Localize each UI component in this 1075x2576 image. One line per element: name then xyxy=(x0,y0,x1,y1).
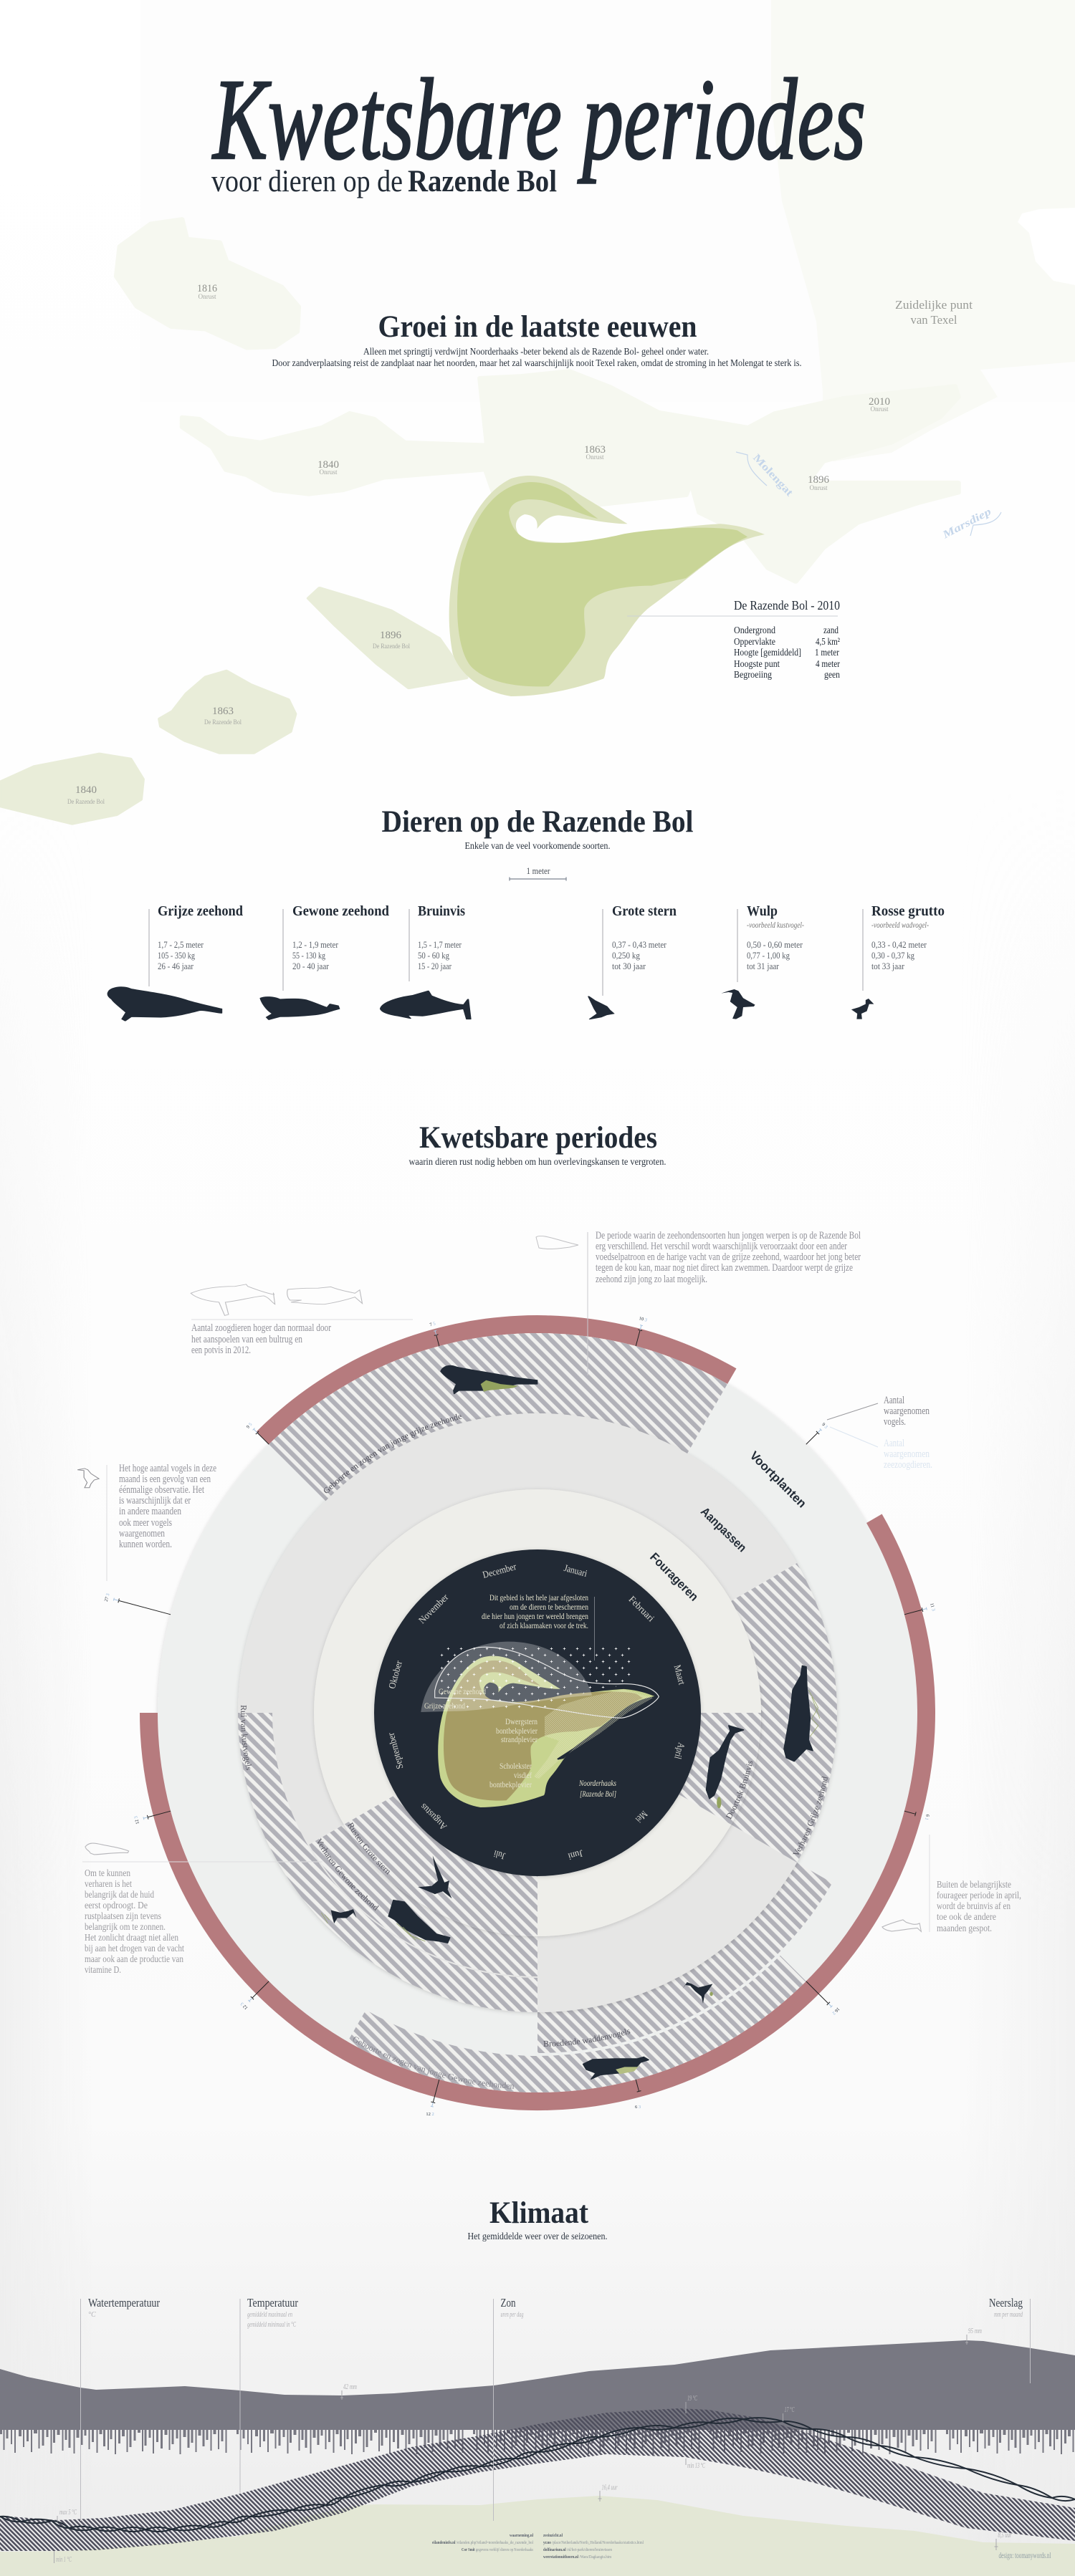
callout: seal pupping periods: zeehond zijn jong zo laat mogelijk. xyxy=(596,1274,707,1285)
callout: seal pupping periods: erg verschillend. Het verschil wordt waarschijnlijk veroorzaakt door een ander xyxy=(596,1241,847,1252)
facts table: De Razende Bol 2010: 1 meter xyxy=(815,648,839,658)
species: Gewone zeehond: 1,2 - 1,9 meter xyxy=(292,939,339,950)
series label: Neerslag: mm per maand xyxy=(994,2311,1023,2319)
animal icons in rings xyxy=(321,1365,820,2079)
species: Rosse grutto xyxy=(851,904,945,1019)
channel: Marsdiep: Marsdiep xyxy=(940,506,993,542)
hatched period: moult harbour seal xyxy=(309,1825,538,1976)
callout: whales xyxy=(191,1284,413,1356)
note: closed area: die hier hun jongen ter wereld brengen xyxy=(482,1611,588,1621)
species: Grote stern: 0,250 kg xyxy=(612,950,640,961)
map label: 1896: 1896 xyxy=(808,474,830,486)
centre map: Noorderhaaks xyxy=(421,1592,659,1807)
species: Rosse grutto: Rosse grutto xyxy=(871,904,945,919)
species: Gewone zeehond: 20 - 40 jaar xyxy=(292,961,330,971)
map label: 1840: 1840 xyxy=(317,459,339,471)
map label: 2010 xyxy=(869,396,890,413)
species: Wulp: tot 31 jaar xyxy=(747,961,780,971)
data label: 95 mm xyxy=(965,2327,982,2345)
middle ring: Aanpassen xyxy=(238,1413,837,2012)
map shapes: Onrust historic positions xyxy=(117,219,958,582)
sources left column xyxy=(432,2533,533,2552)
callout: whales: Aantal zoogdieren hoger dan normaal door xyxy=(191,1322,331,1334)
callout: moulting: Het zonlicht draagt niet allen xyxy=(85,1932,178,1943)
labels on island: bontbekplevier xyxy=(489,1779,532,1789)
month observation ticks: 10 3 xyxy=(639,1316,648,1323)
labels on island: visdief xyxy=(514,1770,532,1780)
scale bar: 1 meter xyxy=(510,865,566,881)
map label: 1840 Razende Bol xyxy=(67,784,105,805)
map label: 1896 Razende Bol xyxy=(373,630,410,650)
icon: seal outline xyxy=(536,1236,578,1249)
callout: moulting: eerst opdroogt. De xyxy=(85,1900,148,1911)
facts table: De Razende Bol 2010: zand xyxy=(823,625,838,636)
callout: moulting: vitamine D. xyxy=(85,1964,121,1975)
centre disc xyxy=(374,1549,701,1876)
callout: birds one-off observation xyxy=(77,1463,216,1581)
map label: 1840: Onrust xyxy=(320,468,338,476)
sources right column xyxy=(543,2533,644,2560)
callout: birds one-off observation: in andere maanden xyxy=(119,1506,182,1517)
map label: 1840 Razende Bol: 1840 xyxy=(75,784,97,796)
data label: 95 mm: 95 mm xyxy=(968,2327,982,2335)
legend: observed birds: Aantal xyxy=(884,1395,904,1406)
section: vulnerable periods heading xyxy=(408,1121,666,1168)
section: animals heading: Enkele van de veel voorkomende soorten. xyxy=(464,841,611,852)
icon: godwit moulting xyxy=(321,1909,356,1923)
island olive xyxy=(444,1661,643,1801)
species: Gewone zeehond xyxy=(261,904,389,1019)
icon: curlew foraging xyxy=(682,1982,713,2004)
pink arc: spring to autumn observation band xyxy=(140,1514,935,2110)
radial chart: vulnerable periods per month xyxy=(77,1230,1021,2117)
hatched period: birth harbour seals xyxy=(348,1956,806,2092)
facts table: De Razende Bol 2010: Ondergrond xyxy=(734,625,775,636)
curved period labels: Rusten Grote stern xyxy=(347,1822,390,1875)
species: Wulp xyxy=(721,904,804,1019)
map label: 1816: 1816 xyxy=(197,283,217,294)
curved period labels: Geboorte en zogen van jonge Gewone zeehonden xyxy=(353,2037,514,2089)
section: growth heading and intro xyxy=(272,310,801,369)
pink arc: jan-top observation band xyxy=(257,1315,737,1444)
labels on island: Grijze zeehond xyxy=(424,1701,465,1711)
curved period labels xyxy=(241,1414,828,2089)
callout: birds one-off observation: maand is een gevolg van een xyxy=(119,1474,211,1485)
section: climate heading: Klimaat xyxy=(489,2196,589,2230)
facts table: De Razende Bol 2010: Hoogste punt xyxy=(734,659,780,670)
curved period labels: Doortrek Bruinvis xyxy=(725,1761,752,1820)
data label: min 13 C: min 13 °C xyxy=(687,2462,706,2470)
series label: Zon: uren per dag xyxy=(500,2311,523,2319)
callout: birds one-off observation: kunnen worden. xyxy=(119,1539,172,1550)
labels on island xyxy=(424,1686,538,1789)
map label: 2010: Onrust xyxy=(870,405,889,413)
month observation ticks: 9 5 xyxy=(246,1422,253,1430)
legend: observed sea mammals xyxy=(830,1427,932,1471)
facts table: De Razende Bol 2010 xyxy=(627,598,840,681)
series label: Neerslag: Neerslag xyxy=(989,2296,1023,2310)
ring labels: Voortplanten xyxy=(747,1448,809,1510)
outer ring: Voortplanten xyxy=(158,1333,917,2092)
hatched period: passage porpoise xyxy=(679,1713,761,1825)
species: Rosse grutto: 0,33 - 0,42 meter xyxy=(871,939,927,950)
species: Grote stern: Grote stern xyxy=(612,904,677,919)
species: Grijze zeehond: 105 - 350 kg xyxy=(158,950,195,961)
callout: birds one-off observation: is waarschijnlijk dat er xyxy=(119,1495,191,1506)
tick label: juni: 6 3 xyxy=(635,2105,641,2110)
data label: 17 C xyxy=(783,2406,795,2421)
curved period labels: Verharen Grijze zeehond xyxy=(793,1777,828,1855)
month observation ticks: 12 3 xyxy=(239,2001,249,2011)
icon: tiny bird on island xyxy=(557,1747,575,1760)
month observation ticks: 9 3 xyxy=(821,1422,828,1430)
callout: seal pupping periods: tegen de kou kan, maar nog niet direct kan zwemmen. Daardoor werpt de grijze xyxy=(596,1262,853,1274)
map: historic sandbanks and Texel xyxy=(0,0,1075,824)
map label: 1863: 1863 xyxy=(584,444,606,456)
callout: moulting: verharen is het xyxy=(85,1878,132,1889)
section: vulnerable periods heading: waarin dieren rust nodig hebben om hun overlevingskansen te vergroten. xyxy=(408,1157,666,1168)
species: Bruinvis: 1,5 - 1,7 meter xyxy=(418,939,462,950)
species: Grote stern xyxy=(588,904,677,1019)
label: Noorderhaaks: Noorderhaaks xyxy=(578,1778,616,1788)
data label: min 1 C: min 1 °C xyxy=(56,2556,72,2564)
title xyxy=(211,56,866,198)
map label: 1896 Razende Bol: De Razende Bol xyxy=(373,643,410,650)
legend: observed birds: vogels. xyxy=(884,1416,906,1428)
subtitle: Razende Bol xyxy=(408,165,557,198)
month observation ticks: 11 3 xyxy=(929,1602,936,1612)
facts table: De Razende Bol 2010: De Razende Bol - 2010 xyxy=(734,598,840,612)
callout: whales: het aanspoelen van een bultrug en xyxy=(191,1334,303,1345)
callout: birds one-off observation: ook meer vogels xyxy=(119,1517,172,1529)
species: Grote stern: tot 30 jaar xyxy=(612,961,646,971)
icon: harbour seal xyxy=(261,997,339,1019)
island hatch: restricted area xyxy=(534,1689,654,1779)
data label: min 1 C xyxy=(54,2551,72,2564)
species: Bruinvis: Bruinvis xyxy=(418,904,465,919)
tick label: juli: 12 2 xyxy=(426,2112,434,2117)
month labels: Februari xyxy=(626,1594,656,1624)
callout: porpoise: Buiten de belangrijkste xyxy=(937,1879,1011,1890)
species: Grote stern: 0,37 - 0,43 meter xyxy=(612,939,667,950)
series label: Temperatuur xyxy=(240,2296,298,2493)
data label: 42 mm: 42 mm xyxy=(343,2383,357,2391)
callout: moulting xyxy=(82,1843,322,1975)
legend: observed sea mammals: Aantal xyxy=(884,1438,904,1449)
data label: 19 C: 19 °C xyxy=(687,2395,698,2403)
month labels: Januari xyxy=(563,1562,588,1579)
series label: Neerslag xyxy=(989,2296,1031,2383)
label: Noorderhaaks: [Razende Bol] xyxy=(580,1789,616,1799)
climate chart xyxy=(0,2296,1075,2576)
hatched period: moult coastal birds xyxy=(238,1713,538,2012)
note: closed area xyxy=(482,1592,595,1661)
note: closed area: of zich klaarmaken voor de trek. xyxy=(500,1620,588,1630)
ring labels: Fourageren xyxy=(647,1550,701,1604)
data label: max 5 C: max 5 °C xyxy=(59,2509,77,2517)
icon: seal outline left xyxy=(85,1843,129,1855)
species: Grijze zeehond xyxy=(108,904,243,1021)
icon: bird outline xyxy=(77,1469,99,1488)
callout: seal pupping periods: De periode waarin de zeehondensoorten hun jongen werpen is op de Razende Bol xyxy=(596,1230,861,1241)
map label: 1816: Onrust xyxy=(198,293,216,300)
month labels: Maart xyxy=(672,1663,687,1686)
hatched period: birth grey seals xyxy=(269,1333,727,1501)
hatched period: moult grey seal xyxy=(731,1563,837,1863)
callout: moulting: Om te kunnen xyxy=(85,1868,130,1878)
map label: 1816 xyxy=(197,283,217,300)
callout: porpoise xyxy=(882,1835,1021,1933)
labels on island: strandplevier xyxy=(501,1734,538,1744)
map shapes: Razende Bol historic positions xyxy=(0,588,467,824)
section: animals heading: Dieren op de Razende Bol xyxy=(381,805,694,839)
month labels xyxy=(385,1561,687,1863)
data label: max 5 C xyxy=(57,2509,77,2522)
callout: porpoise: fourageer periode in april, xyxy=(937,1890,1021,1900)
icon: godwit xyxy=(851,999,874,1019)
callout: whales: een potvis in 2012. xyxy=(191,1345,251,1356)
sources left column: Cor Smit gegevens verblijf dieren op Noorderhaaks xyxy=(462,2547,533,2552)
map shape: Razende Bol 2010 xyxy=(449,476,765,696)
note: closed area: Dit gebied is het hele jaar afgesloten xyxy=(489,1592,588,1602)
series label: Zon: Zon xyxy=(500,2296,516,2310)
month observation ticks: 6 1 xyxy=(924,1814,930,1820)
species: Wulp: -voorbeeld kustvogel- xyxy=(747,920,804,930)
map label: 1896 Razende Bol: 1896 xyxy=(380,630,401,641)
callout: seal pupping periods xyxy=(536,1230,861,1375)
hatched period: breeding wadden birds xyxy=(538,1863,832,2053)
data label: min 13 C xyxy=(686,2459,706,2470)
data label: 8,5 uur xyxy=(995,2532,1012,2550)
band: air temperature min-max xyxy=(0,2408,1075,2551)
callout: porpoise: maanden gespot. xyxy=(937,1923,992,1933)
series label: Temperatuur: gemiddeld maximaal en xyxy=(247,2311,292,2319)
curved period labels: Rui van kustvogels xyxy=(241,1705,252,1770)
sources right column: yr.no /place/Netherlands/North_Holland/Noorderhaaks/statistics.html xyxy=(543,2540,644,2545)
callout: moulting: maar ook aan de productie van xyxy=(85,1953,183,1964)
callout: birds one-off observation: Het hoge aantal vogels in deze xyxy=(119,1463,216,1474)
data label: 42 mm xyxy=(340,2383,357,2400)
bars: precipitation fringe xyxy=(0,2428,1075,2457)
icon: porpoise with fish xyxy=(706,1726,744,1808)
month labels: November xyxy=(416,1592,451,1625)
page background xyxy=(0,1259,1075,2552)
scale bar: 1 meter: 1 meter xyxy=(526,865,550,876)
label: Noorderhaaks xyxy=(578,1778,616,1799)
legend: observed sea mammals: waargenomen xyxy=(884,1448,930,1460)
species: Bruinvis: 50 - 60 kg xyxy=(418,950,449,961)
line: water temperature strand B xyxy=(0,2418,1075,2532)
month labels: Augustus xyxy=(418,1802,449,1832)
section: animals heading xyxy=(381,805,694,852)
section: climate heading: Het gemiddelde weer over de seizoenen. xyxy=(467,2231,608,2242)
plus marks: closed water area xyxy=(437,1646,631,1708)
ring labels xyxy=(647,1448,809,1604)
facts table: De Razende Bol 2010: Hoogte [gemiddeld] xyxy=(734,648,801,658)
labels on island: Gewone zeehond xyxy=(439,1686,486,1696)
sources left column: waarneming.nl xyxy=(510,2533,533,2538)
month observation ticks: 7 5 xyxy=(429,1321,436,1327)
hatched period: resting terns xyxy=(344,1794,538,1936)
map label: 1896: Onrust xyxy=(810,484,828,491)
icon: grey seal with pup xyxy=(441,1365,538,1394)
species: Gewone zeehond: 55 - 130 kg xyxy=(292,950,325,961)
map label: 1896 xyxy=(808,474,830,491)
series label: Watertemperatuur: °C xyxy=(88,2311,96,2319)
map label: 1863 Razende Bol: De Razende Bol xyxy=(204,719,242,726)
month labels: Juni xyxy=(567,1848,584,1863)
month observation ticks: 27 3 xyxy=(104,1593,111,1602)
callout: moulting: belangrijk dat de huid xyxy=(85,1889,154,1900)
species: Bruinvis: 15 - 20 jaar xyxy=(418,961,452,971)
callout: porpoise: toe ook de andere xyxy=(937,1911,996,1922)
channel: Marsdiep xyxy=(940,506,1001,542)
icon: porpoise xyxy=(381,991,470,1019)
month labels: December xyxy=(482,1561,517,1580)
inner ring: Fourageren xyxy=(314,1489,761,1936)
species: Grijze zeehond: 26 - 46 jaar xyxy=(158,961,194,971)
map label: Zuidelijke punt van Texel: van Texel xyxy=(910,313,957,327)
series label: Temperatuur: gemiddeld minimaal in °C xyxy=(247,2321,296,2329)
section: growth heading and intro: Groei in de laatste eeuwen xyxy=(378,310,697,344)
icon: harbour seal with pup xyxy=(583,2057,649,2079)
series label: Watertemperatuur xyxy=(80,2296,160,2521)
data label: 16,4 uur xyxy=(598,2484,618,2501)
facts table: De Razende Bol 2010: 4,5 km² xyxy=(816,637,840,648)
data label: 8,5 uur: 8,5 uur xyxy=(998,2532,1012,2539)
facts table: De Razende Bol 2010: Begroeiing xyxy=(734,670,772,681)
facts table: De Razende Bol 2010: geen xyxy=(824,670,840,681)
icon: tern xyxy=(588,996,613,1019)
callout: birds one-off observation: waargenomen xyxy=(119,1528,166,1539)
species: Grijze zeehond: 1,7 - 2,5 meter xyxy=(158,939,204,950)
island green xyxy=(438,1656,654,1807)
series label: Temperatuur: Temperatuur xyxy=(247,2296,298,2310)
note: closed area: om de dieren te beschermen xyxy=(510,1602,588,1612)
series label: Watertemperatuur: Watertemperatuur xyxy=(88,2296,160,2310)
month observation ticks: 12 3 xyxy=(133,1815,140,1825)
legend: observed sea mammals: zeezoogdieren. xyxy=(884,1459,932,1471)
section: growth heading and intro: Door zandverplaatsing reist de zandplaat naar het noorden, maar het zal waarschijnlijk nooit Texel raken, omdat de stroming in het Molengat te sterk is. xyxy=(272,358,801,369)
icon: humpback outline xyxy=(191,1284,275,1315)
month observation ticks: 16 2 xyxy=(831,2007,841,2016)
month labels: September xyxy=(385,1731,405,1770)
callout: moulting: belangrijk om te zonnen. xyxy=(85,1921,166,1932)
ring labels: Aanpassen xyxy=(698,1504,749,1554)
channel: Molengat xyxy=(736,452,795,499)
map shape: white corner xyxy=(1018,208,1075,285)
month labels: Oktober xyxy=(386,1659,404,1690)
callout: porpoise: wordt de bruinvis af en xyxy=(937,1900,1010,1911)
section: vulnerable periods heading: Kwetsbare periodes xyxy=(419,1121,657,1155)
curved period labels: Broedende waddenvogels xyxy=(543,2029,631,2047)
species: Wulp: 0,50 - 0,60 meter xyxy=(747,939,803,950)
icon: moulting grey seal xyxy=(784,1666,820,1762)
sources right column: dolfinarium.nl /nl/het-park/dieren/bruinvissen xyxy=(543,2547,613,2552)
callout: moulting: bij aan het drogen van de vacht xyxy=(85,1943,184,1953)
map shape: Texel xyxy=(771,0,1075,461)
species: Rosse grutto: tot 33 jaar xyxy=(871,961,905,971)
map label: Zuidelijke punt van Texel: Zuidelijke punt xyxy=(895,298,973,312)
sources right column: zeeinzicht.nl xyxy=(543,2533,563,2538)
icon: tern xyxy=(418,1855,452,1898)
map label: 1863 Razende Bol: 1863 xyxy=(212,706,234,717)
icon: moulting harbour seal xyxy=(388,1900,450,1943)
curved period labels: Verharen Gewone zeehond xyxy=(317,1838,379,1911)
icon: porpoise outline xyxy=(882,1920,921,1931)
outline: harbour seal area xyxy=(435,1647,659,1718)
month labels: April xyxy=(672,1741,687,1760)
area: sun hours xyxy=(0,2496,1075,2576)
labels on island: Dwergstern xyxy=(505,1716,538,1726)
curved period labels: Geboorte en zogen van jonge grijze zeehonden xyxy=(324,1414,462,1493)
labels on island: bontbekplevier xyxy=(496,1726,538,1736)
species: Wulp: 0,77 - 1,00 kg xyxy=(747,950,790,961)
species: Gewone zeehond: Gewone zeehond xyxy=(292,904,389,919)
section: growth heading and intro: Alleen met springtij verdwijnt Noorderhaaks -beter bekend als de Razende Bol- geheel onder water. xyxy=(363,347,709,357)
series label: Zon xyxy=(493,2296,523,2521)
month observation ticks xyxy=(104,1316,936,2117)
species: Rosse grutto: 0,30 - 0,37 kg xyxy=(871,950,914,961)
line: water temperature strand A xyxy=(0,2418,1075,2532)
icon: grey seal xyxy=(108,987,221,1021)
map label: 1863 xyxy=(584,444,606,461)
area: precipitation xyxy=(0,2340,1075,2430)
dome: grey seal area xyxy=(421,1642,592,1712)
callout: moulting: rustplaatsen zijn tevens xyxy=(85,1911,161,1921)
map label: 1863: Onrust xyxy=(586,453,604,461)
callout: birds one-off observation: éénmalige observatie. Het xyxy=(119,1484,204,1496)
month labels: Mei xyxy=(634,1809,650,1825)
data label: 17 C: 17 °C xyxy=(784,2406,795,2414)
legend: observed birds xyxy=(827,1395,930,1428)
subtitle: voor dieren op de xyxy=(211,165,403,198)
callout: seal pupping periods: voedselpatroon en de harige vacht van de grijze zeehond, waardoor het jong beter xyxy=(596,1251,861,1263)
data label: 19 C xyxy=(686,2395,698,2413)
map label: 1840 Razende Bol: De Razende Bol xyxy=(67,798,105,805)
icon: sperm whale outline xyxy=(287,1287,363,1304)
species: Grijze zeehond: Grijze zeehond xyxy=(158,904,243,919)
month labels: Juli xyxy=(492,1848,506,1862)
species: Wulp: Wulp xyxy=(747,904,778,919)
channel: Molengat: Molengat xyxy=(750,452,795,499)
section: climate heading xyxy=(467,2196,608,2242)
facts table: De Razende Bol 2010: 4 meter xyxy=(816,659,840,670)
data label: 16,4 uur: 16,4 uur xyxy=(602,2484,618,2491)
map label: 1863 Razende Bol xyxy=(204,706,242,726)
species: Rosse grutto: -voorbeeld wadvogel- xyxy=(871,920,929,930)
species: Bruinvis xyxy=(381,904,470,1019)
sources right column: weerstationuithoorn.nl /Waes/Dagkaogiu.htm xyxy=(543,2555,611,2560)
map label: 2010: 2010 xyxy=(869,396,890,408)
map label: Zuidelijke punt van Texel xyxy=(895,298,973,327)
icon: curlew xyxy=(721,989,755,1019)
sources left column: eilandeninfo.nl /eilanden.php?eiland=noorderhaaks_de_razende_bol xyxy=(432,2540,533,2545)
facts table: De Razende Bol 2010: Oppervlakte xyxy=(734,637,775,648)
labels on island: Scholekster xyxy=(500,1761,532,1771)
legend: observed birds: waargenomen xyxy=(884,1405,930,1417)
map label: 1840 xyxy=(317,459,339,476)
